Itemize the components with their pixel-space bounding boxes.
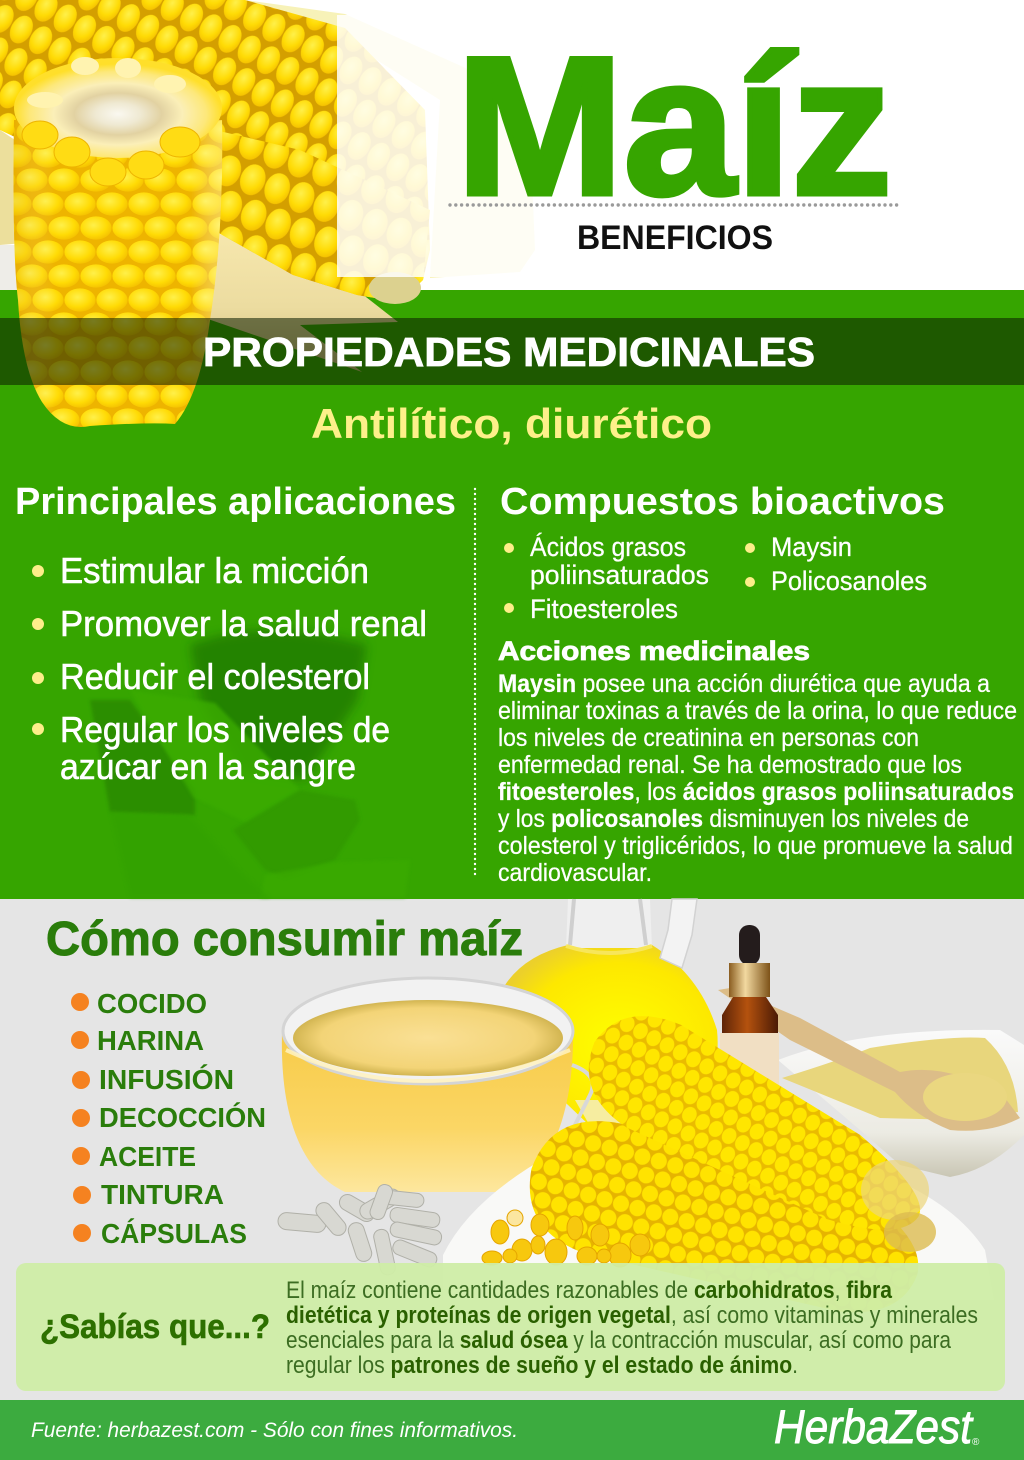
subtitle: BENEFICIOS (577, 219, 773, 257)
amber glass (722, 997, 778, 1035)
text block: medicinal actions: Maysin posee una acción diurética que ayuda a (498, 670, 990, 698)
form: oil: ACEITE (99, 1141, 196, 1172)
callout text: regular los patrones de sueño y el estado de ánimo. (286, 1352, 798, 1379)
tea surface (293, 1000, 563, 1076)
form: flour: HARINA (97, 1025, 204, 1056)
corn flour (782, 1037, 1018, 1120)
form: infusion: INFUSIÓN (99, 1064, 234, 1095)
label (720, 1033, 779, 1091)
compound: fatty acids: Ácidos grasos (530, 532, 686, 562)
upper ear (566, 993, 946, 1268)
upper ear kernels (0, 0, 430, 302)
logo: HerbaZest: HerbaZest (774, 1400, 974, 1453)
kernels around the cut edge (22, 121, 200, 186)
photo: tincture bottle (720, 925, 779, 1091)
compound: fatty acids: poliinsaturados (530, 560, 709, 590)
background: green panel (0, 290, 1024, 899)
lower ear kernels (215, 130, 430, 302)
photo: cup of corn-silk tea (282, 978, 593, 1192)
photo: loose corn kernels (482, 1210, 650, 1267)
text block: medicinal actions: enfermedad renal. Se ha demostrado que los (498, 751, 962, 779)
glass rim (283, 978, 573, 1084)
dotted column divider (474, 489, 476, 876)
handle (572, 1065, 593, 1125)
silk at the tips (861, 1160, 929, 1220)
wooden spoon (718, 988, 1020, 1131)
form: capsules: CÁPSULAS (101, 1218, 247, 1249)
white translucent panel behind the title (337, 15, 1024, 277)
gold collar (729, 963, 770, 997)
lower ear (514, 1104, 935, 1338)
cut top (14, 58, 222, 158)
compound: policosanols: Policosanoles (771, 566, 927, 596)
bullet item 3: Reducir el colesterol (60, 656, 370, 697)
cob body (14, 120, 222, 427)
heading: bioactive compounds: Compuestos bioactivos (500, 481, 945, 523)
text block: medicinal actions: y los policosanoles disminuyen los niveles de (498, 805, 969, 833)
subheading: antilithic, diuretic: Antilítico, diurético (311, 400, 712, 447)
heading: main applications: Principales aplicaciones (15, 481, 456, 523)
form: cooked: COCIDO (97, 988, 207, 1019)
husk below the ears (0, 130, 60, 245)
bullet item 1: Estimular la micción (60, 550, 369, 591)
shadow under corn (0, 245, 60, 290)
title: Maíz (456, 16, 892, 236)
photo: corn ears on plate (514, 993, 946, 1338)
cup body (282, 1032, 573, 1192)
bowl (778, 1030, 1024, 1177)
callout heading: ¿Sabías que...? (40, 1308, 270, 1346)
photo: oil jug (500, 899, 718, 1126)
photo: plate (443, 1150, 994, 1300)
bullet item 4: azúcar en la sangre (60, 746, 356, 787)
bullet item 4: Regular los niveles de (60, 709, 390, 750)
photo: person holding abdomen, green duotone (90, 630, 410, 898)
band: section heading background (0, 318, 1024, 385)
heading: medicinal properties: PROPIEDADES MEDICINALES (203, 329, 815, 375)
background: grey consumption panel (0, 899, 1024, 1400)
heading: how to consume: Cómo consumir maíz (46, 913, 523, 966)
text block: medicinal actions (498, 670, 1017, 887)
callout text: esenciales para la salud ósea y la contracción muscular, así como para (286, 1327, 952, 1354)
front lip highlight (286, 1050, 570, 1081)
photo: capsules (277, 1183, 443, 1276)
compound: maysin: Maysin (771, 532, 852, 562)
ear tip (369, 272, 421, 304)
logo: HerbaZest: ® (972, 1437, 980, 1448)
text block: medicinal actions: los niveles de creatinina en personas con (498, 724, 919, 752)
bullet item 2: Promover la salud renal (60, 603, 427, 644)
footer source note: Fuente: herbazest.com - Sólo con fines informativos. (31, 1419, 518, 1442)
footer bar (0, 1400, 1024, 1460)
compound: fatty acids (504, 532, 709, 590)
form: decoction: DECOCCIÓN (99, 1102, 266, 1133)
photo: bowl with corn flour and wooden spoon (718, 988, 1024, 1177)
photo: cut corn cob (14, 57, 222, 427)
callout background (16, 1263, 1005, 1391)
callout text: El maíz contiene cantidades razonables de carbohidratos, fibra (286, 1277, 893, 1304)
photo: corn ears with husk behind the title (0, 0, 535, 372)
heading: medicinal actions: Acciones medicinales (498, 636, 810, 666)
list: main applications (32, 550, 427, 787)
text block: medicinal actions: cardiovascular. (498, 859, 652, 887)
compound: phytosterols: Fitoesteroles (530, 594, 678, 624)
callout: did you know (16, 1263, 1005, 1391)
bullet item 4 (32, 709, 390, 787)
dotted title rule (450, 203, 898, 207)
dropper bulb (739, 925, 760, 965)
callout text (286, 1277, 978, 1379)
cob side shading (14, 120, 222, 427)
list: bioactive compounds (504, 532, 927, 624)
form: tincture: TINTURA (101, 1179, 224, 1210)
callout text: dietética y proteínas de origen vegetal, así como vitaminas y minerales (286, 1302, 978, 1329)
list: forms of consumption (71, 988, 266, 1249)
background: white header (0, 0, 1024, 290)
